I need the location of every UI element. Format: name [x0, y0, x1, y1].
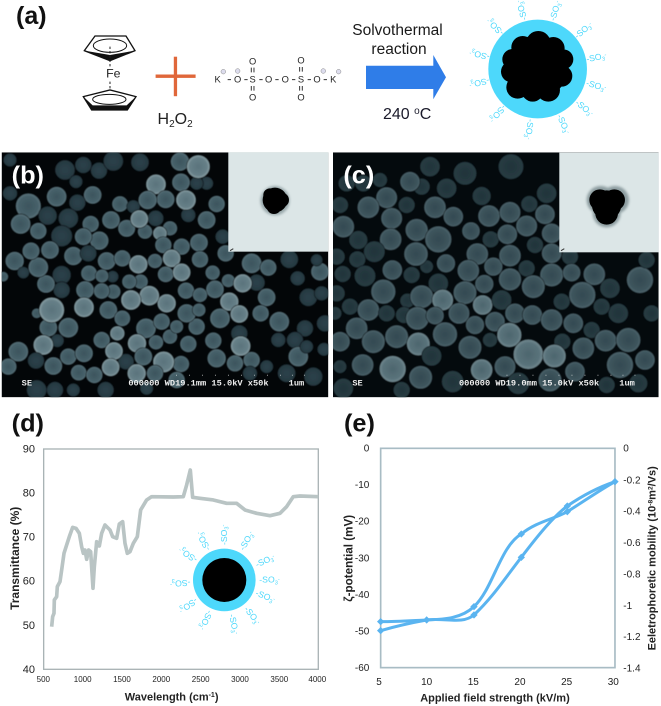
label (c): (c)	[343, 162, 374, 190]
icon: sulfonated particle: 3	[225, 526, 231, 530]
icon: sulfonated particle: -SO	[259, 575, 275, 585]
icon: sulfonated particle: 3	[268, 599, 273, 606]
x axis ticks: 500	[37, 675, 51, 684]
icon: sulfonated core-shell particle: -	[525, 137, 531, 140]
icon: sulfonated core-shell particle: -	[489, 118, 494, 123]
x axis ticks: 3000	[231, 675, 249, 684]
text: SEM scale information	[352, 375, 635, 388]
icon: sulfonated core-shell particle: -	[604, 52, 607, 59]
icon: potassium persulfate formula: O	[297, 56, 305, 66]
icon: sulfonated core-shell particle: -	[555, 0, 561, 4]
icon: sulfonated particle: 3	[200, 531, 207, 536]
icon: sulfonated particle: 3	[270, 558, 276, 564]
axis title: Wavelength: )	[215, 691, 219, 703]
icon: sulfonated core-shell particle: 3	[470, 77, 474, 84]
text: SEM scale information: SE	[22, 378, 32, 388]
icon: sulfonated core-shell particle: -SO	[524, 119, 536, 135]
icon: sulfonated core-shell particle: -SO	[491, 103, 508, 121]
x axis ticks: 1000	[74, 675, 92, 684]
axis title: electrophoretic mobility: 2	[647, 486, 654, 490]
inset: TEM image of particle	[228, 152, 328, 252]
icon: sulfonated particle: -SO	[219, 530, 229, 545]
arrow: blue reaction arrow	[366, 55, 446, 99]
icon: sulfonated particle: -	[170, 581, 172, 587]
left y axis ticks: -30	[355, 553, 370, 564]
icon: sulfonated particle: -	[255, 620, 261, 625]
icon: sulfonated core-shell particle: -	[564, 130, 571, 135]
panel: (a) reaction scheme	[16, 0, 608, 140]
chart frame	[381, 448, 615, 668]
icon: sulfonated particle: 3	[229, 629, 235, 634]
y axis ticks	[23, 444, 35, 676]
icon: sulfonated particle: -SO	[254, 588, 272, 603]
icon: sulfonated core-shell particle: -SO	[488, 20, 506, 38]
icon: potassium persulfate formula: O	[234, 75, 241, 85]
x axis ticks: 20	[514, 677, 526, 688]
panel: (b) SEM micrograph	[0, 151, 333, 400]
icon: sulfonated particle: -	[233, 632, 239, 635]
icon: sulfonated particle: -SO	[254, 554, 272, 569]
axis title: Wavelength: -1	[209, 692, 215, 699]
icon: potassium persulfate formula: O	[265, 75, 272, 85]
icon: sulfonated core-shell particle: 3	[487, 113, 494, 119]
icon: sulfonated core-shell particle: -SO	[473, 49, 491, 62]
text: SEM scale information: 000000 WD19.0mm 15.0kV x50k	[459, 378, 599, 388]
axis title: Wavelength: Wavelength (cm	[125, 691, 209, 703]
right y axis ticks: -0.6	[623, 538, 641, 549]
axis title: Transmittance: Transmittance (%)	[8, 507, 22, 610]
icon: sulfonated particle: -	[178, 608, 183, 614]
text: SEM scale information: 1um	[619, 378, 635, 388]
line chart: zeta potential hysteresis	[381, 482, 615, 631]
icon: sulfonated particle: -	[196, 531, 202, 535]
icon: sulfonated core-shell particle: -	[589, 111, 594, 117]
icon: sulfonated core-shell particle: 3	[522, 134, 528, 137]
right y axis ticks: -1.2	[623, 632, 641, 643]
x axis ticks: 30	[608, 677, 619, 688]
label (e): (e)	[344, 410, 375, 438]
icon: sulfonated particle: 3	[181, 545, 187, 551]
x axis ticks: 25	[561, 677, 573, 688]
icon: sulfonated core-shell particle: -SO	[572, 23, 590, 41]
icon: sulfonated core-shell particle: -SO	[555, 113, 570, 131]
text: SEM scale information	[22, 375, 305, 388]
icon: sulfonated particle: 3	[196, 622, 203, 627]
icon: potassium persulfate formula: S	[298, 75, 304, 85]
icon: sulfonated core-shell particle: 3	[520, 1, 527, 5]
panel: (c) SEM micrograph	[328, 152, 660, 398]
icon: sulfonated core-shell particle: -SO	[473, 76, 490, 89]
line chart: spectrum	[52, 470, 318, 627]
text: 240 oC: C	[420, 106, 431, 123]
icon: sulfonated particle: -	[178, 547, 183, 553]
x axis ticks: 5	[376, 677, 382, 688]
icon: sulfonated core-shell particle	[468, 0, 608, 140]
x axis ticks: 2000	[152, 675, 171, 684]
icon: sulfonated particle: -SO	[175, 578, 191, 589]
icon: sulfonated particle: -SO	[181, 596, 200, 613]
axis title: electrophoretic mobility: /Vs)	[646, 466, 658, 486]
x axis ticks: 1500	[113, 675, 131, 684]
icon: sulfonated particle: -	[199, 626, 205, 631]
x axis ticks: 15	[468, 677, 479, 688]
axis title: electrophoretic mobility: Eeletrophoretic mobility (10	[646, 506, 658, 650]
right y axis ticks	[623, 444, 641, 675]
text: H2O2: 2	[169, 119, 175, 130]
left y axis ticks: -10	[355, 480, 370, 491]
right y axis ticks: -1	[623, 601, 633, 612]
left y axis ticks: -20	[355, 517, 370, 528]
y axis ticks: 70	[23, 531, 35, 543]
text: H2O2: 2	[187, 119, 193, 130]
icon: orange plus sign	[156, 57, 196, 96]
left y axis ticks: -40	[355, 590, 370, 601]
y axis ticks: 40	[23, 664, 35, 676]
icon: sulfonated core-shell particle: 3	[602, 56, 606, 63]
icon: sulfonated particle: 3	[250, 534, 257, 540]
panel: (e) zeta potential chart	[342, 410, 658, 705]
icon: sulfonated particle: -SO	[181, 548, 199, 565]
icon: sulfonated particle: -	[271, 553, 276, 560]
x axis ticks	[376, 677, 619, 688]
icon: ferrocene molecule: Fe	[106, 66, 121, 80]
icon: sulfonated particle	[169, 524, 280, 636]
icon: sulfonated particle: -	[221, 524, 227, 526]
icon: sulfonated particle: -	[272, 597, 276, 603]
icon: sulfonated core-shell particle: -	[588, 21, 593, 27]
x axis ticks	[37, 675, 327, 684]
left y axis ticks: -60	[355, 663, 370, 674]
icon: sulfonated core-shell particle: 3	[472, 46, 476, 53]
icon: sulfonated core-shell particle: -SO	[585, 51, 602, 64]
icon: potassium persulfate formula: S	[250, 75, 256, 85]
axis title: electrophoretic mobility: -8	[647, 500, 654, 506]
icon: sulfonated core-shell particle: -SO	[585, 78, 603, 92]
text: H2O2: O	[175, 111, 187, 128]
icon: sulfonated particle: 3	[178, 603, 184, 610]
icon: sulfonated core-shell particle: 3	[490, 16, 496, 23]
chart frame	[44, 449, 318, 669]
text: Solvothermal reaction: Solvothermal	[352, 22, 443, 39]
icon: potassium persulfate formula: O	[282, 75, 289, 85]
icon: potassium persulfate formula: K	[215, 75, 222, 85]
icon: potassium persulfate formula: O	[249, 92, 256, 102]
y axis ticks: 60	[23, 576, 35, 588]
inset: TEM image of clustered particle	[559, 153, 659, 252]
y axis ticks: 50	[23, 620, 35, 632]
icon: sulfonated particle: 3	[171, 577, 175, 583]
x axis ticks: 2500	[192, 675, 210, 684]
icon: sulfonated particle: -	[278, 577, 280, 583]
label (d): (d)	[12, 410, 44, 438]
axis title: electrophoretic mobility: m	[646, 490, 658, 500]
right y axis ticks: -0.8	[623, 569, 641, 580]
axis title: applied field strength: Applied field strength (kV/m)	[420, 693, 570, 705]
icon: sulfonated particle: 3	[275, 580, 278, 586]
icon: potassium persulfate formula: O	[313, 75, 321, 85]
icon: sulfonated core-shell particle: 3	[599, 88, 604, 94]
icon: sulfonated particle: -SO	[237, 534, 254, 552]
x axis ticks: 4000	[308, 675, 327, 684]
icon: sulfonated core-shell particle: 3	[560, 129, 567, 134]
label (b): (b)	[12, 162, 44, 190]
axis title: zeta potential: ζ-potential (mV)	[342, 515, 355, 602]
icon: ferrocene molecule	[83, 36, 136, 110]
x axis ticks: 10	[421, 677, 433, 688]
right y axis ticks: -1.4	[623, 664, 641, 675]
y axis ticks: 80	[23, 488, 35, 500]
x axis ticks: 3500	[270, 675, 289, 684]
panel: (d) FTIR transmittance chart	[8, 410, 327, 703]
icon: sulfonated particle: -SO	[242, 604, 260, 623]
icon: sulfonated core-shell particle: -	[469, 82, 472, 88]
left y axis ticks: -50	[355, 627, 370, 638]
icon: sulfonated particle: 3	[250, 620, 257, 626]
icon: sulfonated particle: -SO	[196, 534, 212, 552]
icon: sulfonated particle: -SO	[227, 613, 240, 630]
icon: sulfonated core-shell particle: -	[486, 17, 491, 23]
icon: sulfonated core-shell particle: -SO	[547, 4, 561, 22]
icon: sulfonated core-shell particle: -	[603, 85, 607, 91]
label (a): (a)	[16, 2, 47, 30]
icon: sulfonated particle: -SO	[199, 609, 215, 627]
icon: sulfonated core-shell particle: 3	[588, 25, 594, 32]
icon: sulfonated core-shell particle: -SO	[573, 97, 592, 115]
text: SEM scale information: SE	[352, 378, 363, 388]
text: H2O2: H	[158, 111, 169, 128]
icon: sulfonated core-shell particle: 3	[557, 3, 564, 8]
icon: potassium persulfate formula: O	[297, 92, 305, 102]
right y axis ticks: -0.2	[623, 475, 641, 486]
text: Solvothermal reaction: reaction	[371, 41, 427, 58]
right y axis ticks: 0	[623, 444, 629, 455]
data markers	[377, 478, 619, 634]
text: SEM scale information: 000000 WD19.1mm 15.0kV x50k	[128, 378, 269, 388]
icon: potassium persulfate formula: K	[330, 75, 337, 85]
icon: sulfonated particle: -	[248, 530, 254, 535]
y axis ticks: 90	[23, 444, 35, 456]
left y axis ticks	[355, 444, 370, 674]
text: SEM scale information: 1um	[289, 378, 304, 388]
icon: sulfonated core-shell particle: -	[469, 49, 472, 56]
icon: potassium persulfate formula: O	[249, 56, 256, 66]
icon: potassium persulfate formula	[215, 56, 341, 102]
icon: sulfonated core-shell particle: -SO	[515, 4, 529, 21]
left y axis ticks: 0	[364, 444, 370, 455]
text: 240 oC: 240	[383, 106, 410, 123]
icon: sulfonated core-shell particle: 3	[584, 112, 590, 118]
text: 240 oC: o	[414, 106, 420, 117]
right y axis ticks: -0.4	[623, 506, 641, 517]
